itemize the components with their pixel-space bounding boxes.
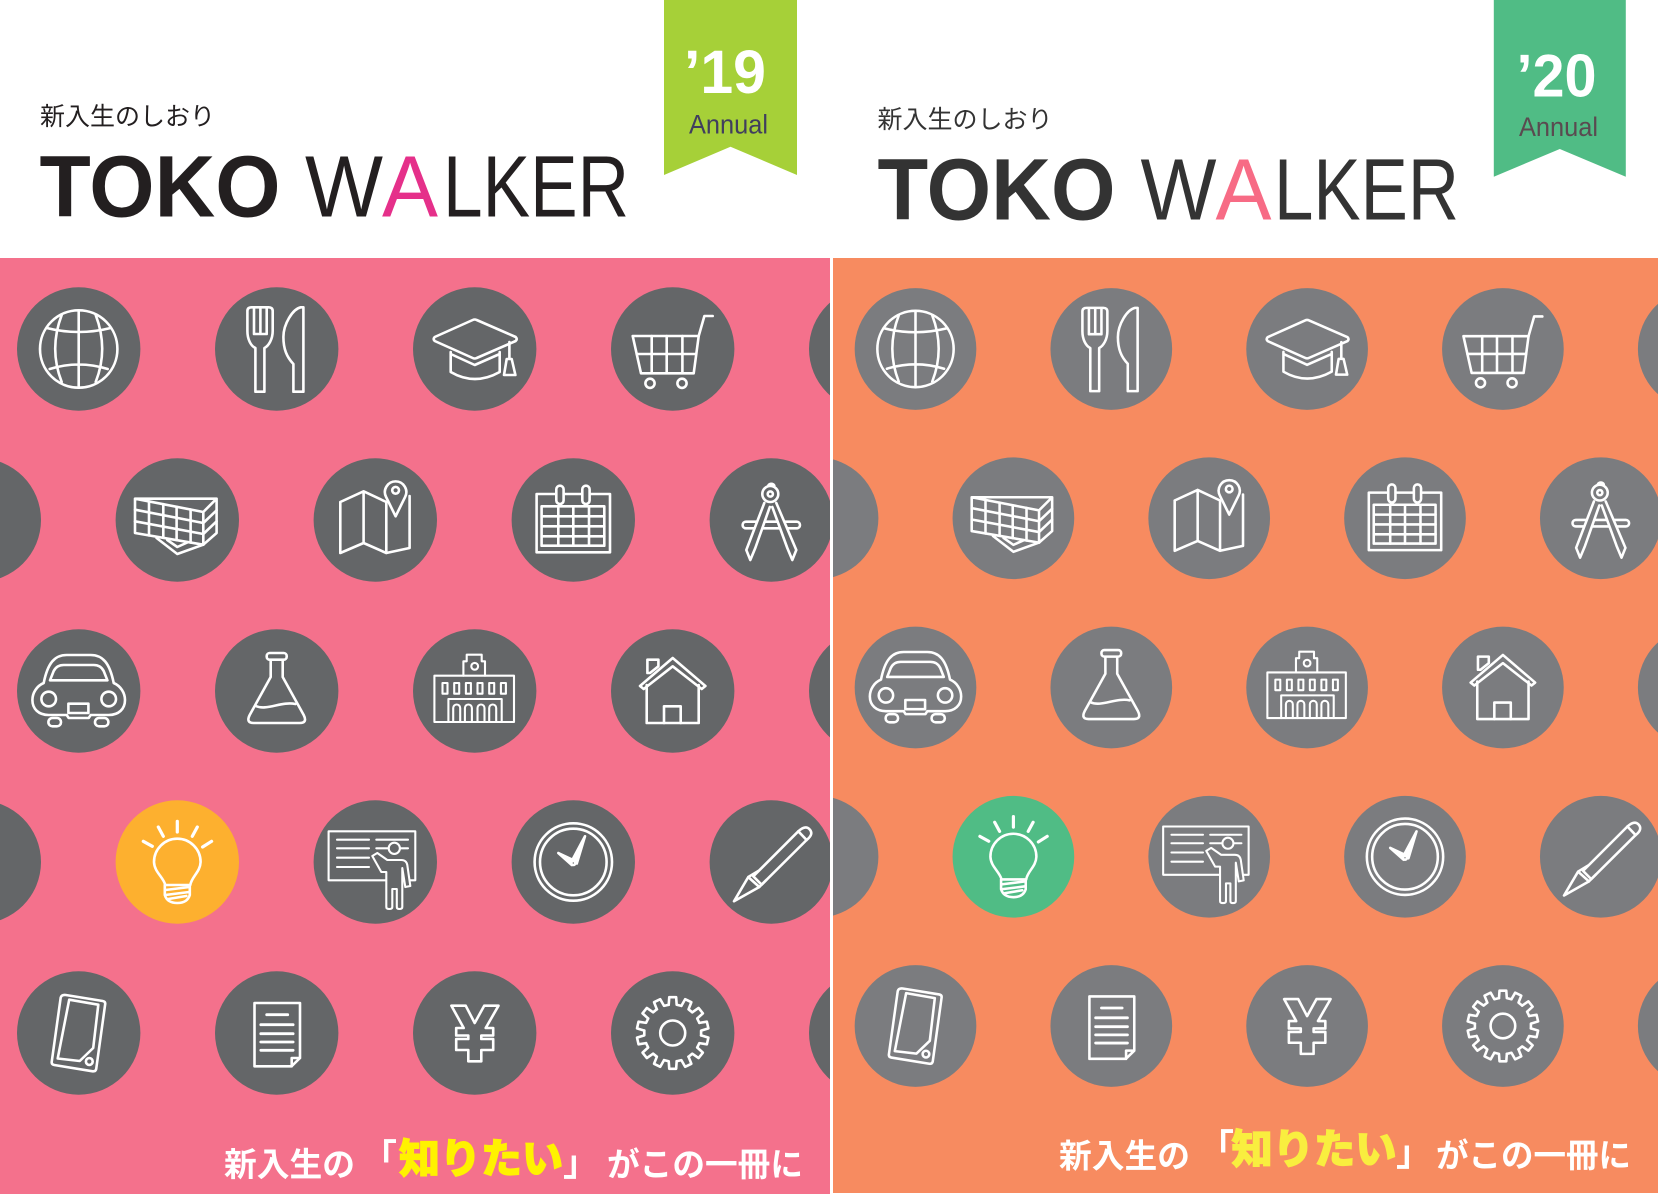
icon: pen bbox=[710, 800, 833, 924]
icon: gear bbox=[1442, 965, 1564, 1087]
partial circle bbox=[1638, 965, 1658, 1087]
title: TOKO WALKER: A bbox=[1216, 141, 1272, 238]
partial circle bbox=[833, 459, 878, 578]
icon: graduation cap bbox=[413, 287, 536, 411]
subtitle: 新入生のしおり bbox=[40, 103, 215, 131]
tagline: 」 bbox=[563, 1142, 599, 1183]
partial circle bbox=[757, 796, 878, 918]
partial circle bbox=[809, 986, 830, 1080]
ribbon: year '20 bbox=[1494, 0, 1626, 177]
ribbon: year '19 bbox=[664, 0, 797, 175]
icon: flask bbox=[1050, 627, 1172, 748]
icon: yen bbox=[413, 971, 536, 1095]
icon: gear bbox=[611, 971, 734, 1095]
ribbon: year '19: Annual bbox=[689, 109, 768, 139]
orange background with icon grid bbox=[757, 258, 1658, 1193]
tagline bbox=[1059, 1126, 1631, 1174]
partial circle bbox=[1638, 304, 1658, 394]
icon: tablet bbox=[855, 965, 976, 1087]
tagline: 「 bbox=[1198, 1127, 1234, 1168]
partial circle bbox=[1638, 627, 1658, 748]
icon: flask bbox=[215, 629, 338, 753]
partial circle bbox=[809, 302, 830, 396]
ribbon: year '20: Annual bbox=[1519, 112, 1598, 142]
title: TOKO WALKER bbox=[40, 139, 629, 236]
icon: document bbox=[1050, 965, 1172, 1087]
panel: 2020 cover bbox=[757, 0, 1658, 1193]
subtitle: 新入生のしおり bbox=[878, 106, 1053, 134]
tagline: がこの一冊に bbox=[1436, 1137, 1631, 1174]
icon: document bbox=[215, 971, 338, 1095]
icon: calendar bbox=[512, 458, 635, 582]
tagline: がこの一冊に bbox=[607, 1146, 803, 1183]
icon: yen bbox=[1246, 965, 1368, 1087]
icon: house bbox=[611, 629, 734, 753]
title: TOKO WALKER: W bbox=[1140, 141, 1216, 238]
title: TOKO WALKER: LKER bbox=[1274, 141, 1459, 238]
title: TOKO WALKER: A bbox=[382, 139, 438, 236]
icon: globe bbox=[855, 288, 976, 410]
icon: drawing compass bbox=[710, 458, 833, 582]
tagline: 知りたい bbox=[1232, 1126, 1396, 1172]
partial circle bbox=[0, 800, 41, 924]
ribbon: year '20: ’20 bbox=[1516, 42, 1596, 110]
icon: globe bbox=[17, 287, 140, 411]
title: TOKO WALKER bbox=[878, 141, 1459, 238]
icon: map with pin bbox=[1148, 457, 1270, 579]
icon: teacher at board bbox=[314, 800, 437, 924]
title: TOKO WALKER: LKER bbox=[443, 139, 629, 236]
icon: car bbox=[855, 627, 976, 748]
icon: grid block bbox=[116, 458, 239, 582]
title: TOKO WALKER: TOKO bbox=[878, 141, 1116, 238]
icon: school building bbox=[1246, 627, 1368, 748]
icon: car bbox=[17, 629, 140, 753]
title: TOKO WALKER: TOKO bbox=[40, 139, 280, 236]
tagline: 新入生の bbox=[1059, 1138, 1190, 1174]
icon: school building bbox=[413, 629, 536, 753]
icon: clock bbox=[512, 800, 635, 924]
icon: pen bbox=[1540, 796, 1658, 918]
partial circle bbox=[809, 644, 830, 738]
icon: fork and knife bbox=[215, 287, 338, 411]
icon: graduation cap bbox=[1246, 288, 1368, 410]
icon: map with pin bbox=[314, 458, 437, 582]
panel: 2019 cover bbox=[0, 0, 830, 1194]
icon: clock bbox=[1344, 796, 1466, 918]
tagline: 知りたい bbox=[399, 1136, 563, 1182]
tagline: 「 bbox=[361, 1137, 397, 1178]
icon: light bulb, highlighted bbox=[953, 796, 1074, 918]
icon: calendar bbox=[1344, 457, 1466, 579]
icon: tablet bbox=[17, 971, 140, 1095]
icon: drawing compass bbox=[1540, 457, 1658, 579]
partial circle bbox=[0, 458, 41, 582]
pink background with icon grid bbox=[0, 258, 830, 1194]
icon: grid block bbox=[953, 457, 1074, 579]
title: TOKO WALKER: W bbox=[305, 139, 383, 236]
tagline: 新入生の bbox=[224, 1146, 355, 1183]
tagline bbox=[224, 1136, 803, 1183]
icon: teacher at board bbox=[1148, 796, 1270, 918]
tagline: 」 bbox=[1396, 1132, 1432, 1173]
icon: shopping cart bbox=[611, 287, 734, 411]
icon: house bbox=[1442, 627, 1564, 748]
icon: light bulb, highlighted bbox=[116, 800, 239, 924]
icon: fork and knife bbox=[1050, 288, 1172, 410]
ribbon: year '19: ’19 bbox=[684, 38, 766, 106]
icon: shopping cart bbox=[1442, 288, 1564, 410]
